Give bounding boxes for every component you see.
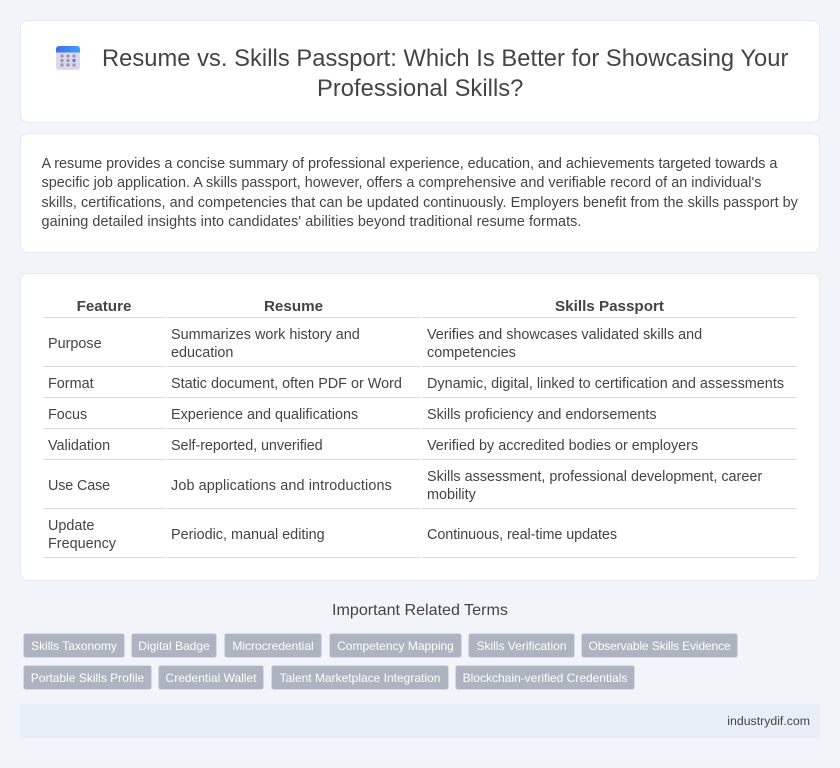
footer text: industrydif.com (727, 714, 810, 728)
tag (329, 633, 462, 658)
tag: Skills Taxonomy (31, 639, 117, 653)
cell (171, 327, 360, 361)
tag (468, 633, 575, 658)
tag: Credential Wallet (166, 671, 256, 685)
row: Validation: Validation (48, 438, 110, 454)
panel: title card (20, 20, 820, 123)
row: Use Case: Use Case (48, 478, 110, 494)
cell: Experience and qualifications (171, 407, 358, 423)
row: Update Frequency (48, 518, 116, 552)
row: Format: Format (48, 376, 94, 392)
cell: Verifies and showcases validated skills and (427, 327, 702, 343)
row: Update Frequency: Frequency (48, 536, 116, 552)
text block: intro: specific job application. A skills passport, however, offers a comprehensive and verifiable record of an individual's (42, 175, 761, 191)
cell: mobility (427, 487, 476, 503)
cell: Dynamic, digital, linked to certification and assessments (427, 376, 784, 392)
comparison table (43, 298, 797, 558)
tag (23, 665, 152, 690)
cell (427, 469, 762, 503)
header: Feature: Feature (77, 298, 131, 315)
cell: Job applications and introductions (171, 478, 392, 494)
cell: Summarizes work history and (171, 327, 360, 343)
cell: competencies (427, 345, 516, 361)
cell: Self-reported, unverified (171, 438, 323, 454)
cell: education (171, 345, 233, 361)
header: Resume: Resume (264, 298, 323, 315)
text block: intro: A resume provides a concise summary of professional experience, education, and achievements targeted towards a (42, 156, 777, 172)
cell: Continuous, real-time updates (427, 527, 617, 543)
row: Update Frequency: Update (48, 518, 94, 534)
cell: Skills proficiency and endorsements (427, 407, 657, 423)
cell: Periodic, manual editing (171, 527, 325, 543)
text block: intro: skills, certifications, and competencies that can be updated continuously. Employers benefit from the skills passport by (42, 195, 798, 211)
tag (455, 665, 635, 690)
title (102, 46, 788, 102)
tag: Skills Verification (476, 639, 567, 653)
tag (23, 633, 125, 658)
cell: Skills assessment, professional development, career (427, 469, 762, 485)
tag (224, 633, 322, 658)
tag (131, 633, 217, 658)
cell (427, 327, 702, 361)
row: Purpose: Purpose (48, 336, 102, 352)
cell: Static document, often PDF or Word (171, 376, 402, 392)
row: Focus: Focus (48, 407, 87, 423)
tag: Digital Badge (138, 639, 210, 653)
tag (271, 665, 449, 690)
tags: related terms (23, 633, 738, 690)
footer bar (20, 704, 820, 738)
text block: intro (42, 156, 798, 230)
title: Professional Skills? (317, 76, 523, 102)
tag: Talent Marketplace Integration (280, 671, 440, 685)
title: Resume vs. Skills Passport: Which Is Better for Showcasing Your (102, 46, 788, 72)
panel: comparison table card (20, 273, 820, 581)
text block: intro: gaining detailed insights into candidates' abilities beyond traditional resume formats. (42, 214, 581, 230)
heading: related terms: Important Related Terms (332, 601, 508, 619)
cell: Verified by accredited bodies or employers (427, 438, 698, 454)
panel: intro card (20, 133, 820, 253)
tag: Portable Skills Profile (31, 671, 144, 685)
tag (158, 665, 264, 690)
tag: Observable Skills Evidence (588, 639, 731, 653)
tag: Blockchain-verified Credentials (463, 671, 627, 685)
tag (581, 633, 738, 658)
header: Skills Passport: Skills Passport (555, 298, 664, 315)
tag: Competency Mapping (337, 639, 454, 653)
tag: Microcredential (232, 639, 314, 653)
icon: calendar (56, 46, 80, 70)
